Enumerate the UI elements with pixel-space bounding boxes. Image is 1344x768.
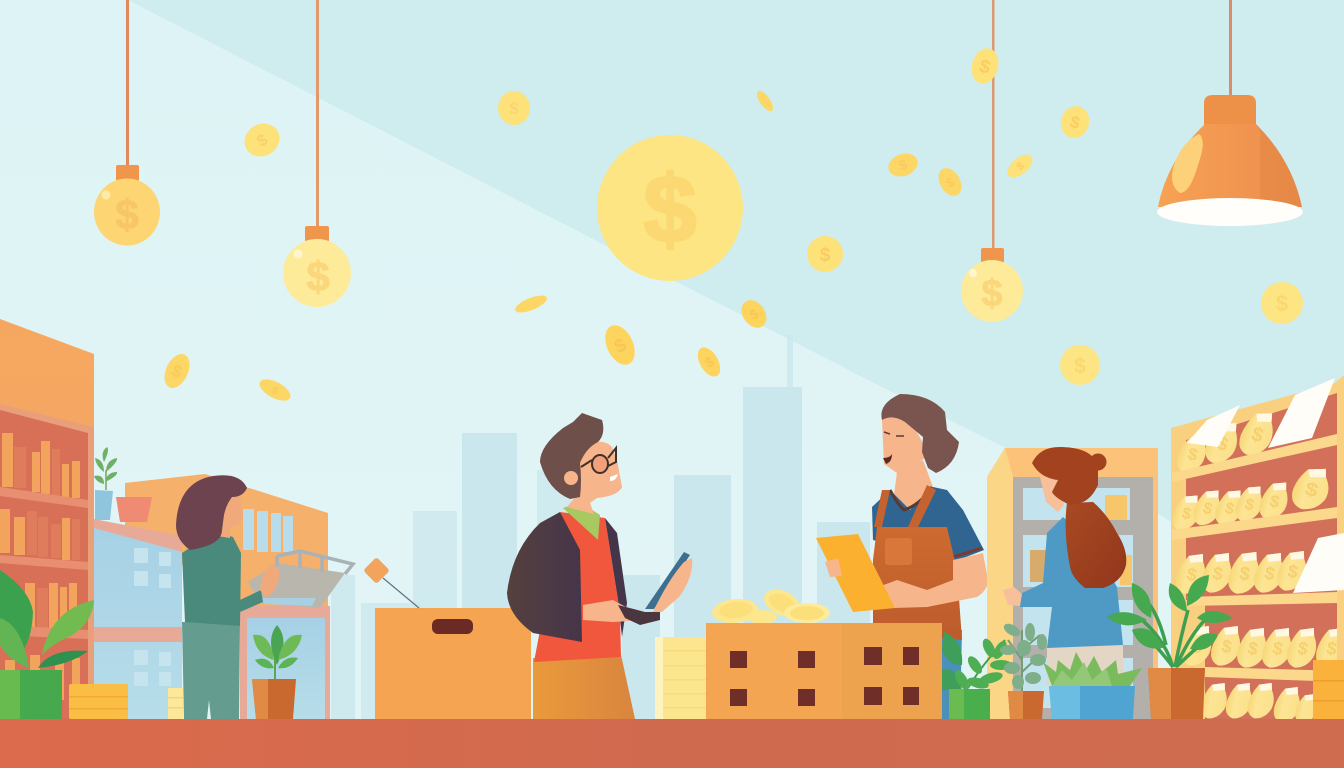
yellow coin block left: [69, 684, 128, 719]
coin bags row 4: $: [1325, 638, 1339, 659]
small plant in terracotta pot: [252, 625, 302, 719]
floating coins: $: [168, 361, 186, 382]
left potted plant: [0, 570, 94, 719]
coin bags row 1: $: [1214, 433, 1231, 456]
right shelving with coin bags: [1170, 375, 1344, 726]
coin bags row 1: $: [1185, 444, 1200, 465]
orange building background: [125, 474, 328, 610]
coin bags row 2: $: [1201, 499, 1214, 519]
floating coins: $: [1014, 160, 1027, 173]
floating coins: $: [509, 99, 519, 118]
coin bags row 4: $: [1246, 638, 1260, 659]
floating coins: [159, 45, 1303, 405]
coin bags row 4: [1180, 622, 1344, 671]
coin bags row 1: $: [1249, 423, 1266, 447]
floating coins: $: [977, 56, 993, 79]
floating coins: $: [253, 130, 272, 151]
floating coins: $: [1074, 355, 1086, 378]
big dollar coin: [597, 135, 743, 281]
hanging coin bulb centre: [283, 0, 351, 307]
coin bags row 3: $: [1263, 563, 1277, 584]
coin bags row 5: [1198, 679, 1320, 726]
blue building left: [94, 519, 182, 719]
left bookshelf: [0, 319, 94, 719]
big plant in terracotta pot: [1107, 575, 1233, 719]
man with tablet: [507, 413, 692, 719]
floating coins: $: [702, 353, 717, 371]
large cardboard box: [375, 608, 531, 719]
hanging coin bulb left: [94, 0, 160, 246]
coin bags row 3: $: [1185, 564, 1199, 585]
floating coins: $: [1068, 112, 1082, 133]
shop worker in apron: [816, 394, 988, 719]
pink pot: [116, 497, 152, 522]
floating coins: $: [746, 305, 762, 323]
shopping basket: [248, 551, 353, 608]
grass in blue pot: [1043, 652, 1142, 719]
coin bags row 3: $: [1286, 561, 1300, 582]
window-box plant: [94, 447, 117, 520]
background ceiling wedge: [128, 0, 1344, 628]
coin bags row 2: $: [1180, 504, 1193, 524]
background skyline: [331, 335, 870, 719]
hanging coin bulb centre: $: [306, 253, 330, 300]
coin bags row 2: $: [1243, 495, 1256, 515]
woman with basket: [176, 475, 280, 719]
coin bags row 2: $: [1268, 491, 1282, 512]
hanging coin bulb right: [961, 0, 1023, 322]
coin bags row 2: $: [1223, 499, 1236, 519]
coin bags row 4: $: [1191, 636, 1205, 657]
coin bags row 2: $: [1303, 478, 1321, 502]
floating coins: $: [897, 156, 910, 174]
pendant lamp: [1157, 0, 1303, 226]
books and shelf boards: [0, 433, 88, 700]
coin bags row 1: [1174, 406, 1279, 477]
coin bags row 3: $: [1211, 563, 1225, 584]
coin bags row 4: $: [1220, 636, 1234, 657]
glass display cabinet: [987, 448, 1158, 719]
coin stack centre: [655, 637, 706, 719]
herb in terracotta pot: [1000, 621, 1047, 719]
coin bags row 4: $: [1271, 638, 1285, 659]
big dollar coin: $: [643, 156, 697, 263]
coin bags row 3: $: [1237, 563, 1252, 586]
hanging coin bulb left: $: [115, 191, 139, 238]
coins on box: [711, 584, 830, 625]
hanging coin bulb right: $: [981, 273, 1003, 315]
coin bags row 4: $: [1296, 638, 1310, 659]
coin bags row 2: [1170, 462, 1334, 534]
floating coins: $: [611, 334, 630, 358]
small coin stack left: [168, 688, 183, 719]
box tag on string: [363, 557, 419, 608]
box with square holes: [706, 623, 942, 719]
floating coins: $: [269, 384, 280, 398]
blue building right: [240, 606, 330, 719]
shop floor: [0, 719, 1344, 768]
coin bags row 3: [1174, 547, 1310, 597]
leafy plant in green pot: [942, 632, 1012, 719]
yellow block right: [1313, 660, 1344, 719]
floating coins: $: [943, 174, 958, 191]
floating coins: $: [820, 245, 831, 266]
woman in blue from behind: [1003, 447, 1126, 685]
floating coins: $: [1276, 291, 1288, 316]
